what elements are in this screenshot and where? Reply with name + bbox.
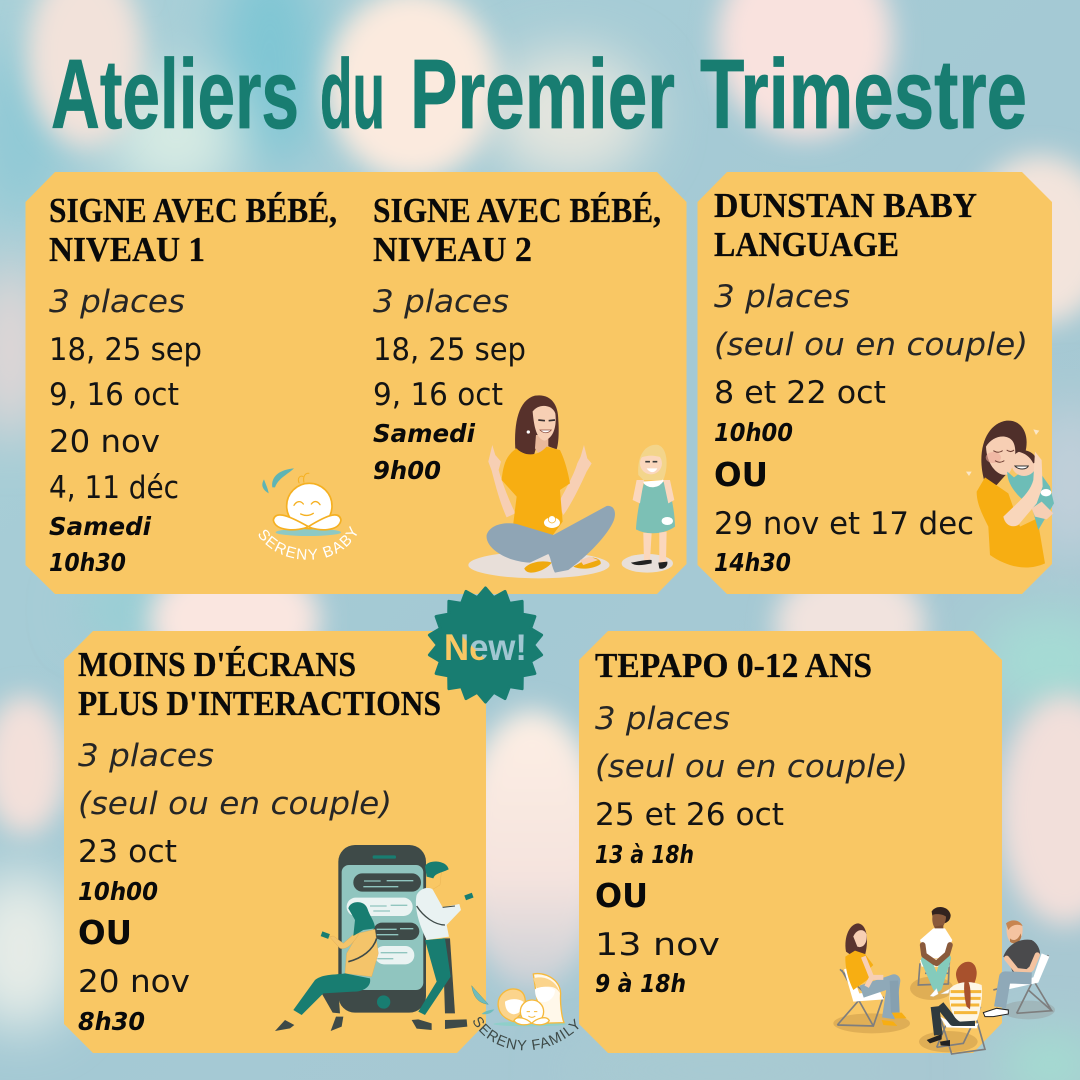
panel text: DUNSTAN BABY bbox=[714, 186, 977, 225]
logo: Sereny Family: SERENY FAMILY bbox=[473, 1017, 578, 1050]
column: niveau 2 bbox=[373, 191, 661, 485]
column: niveau 2: 9h00 bbox=[373, 456, 441, 485]
panel text: 8h30 bbox=[78, 1007, 145, 1036]
column: niveau 1: 9, 16 oct bbox=[49, 377, 179, 413]
panel text: (seul ou en couple) bbox=[595, 749, 908, 785]
badge text: New! bbox=[444, 627, 527, 668]
panel text: 20 nov bbox=[78, 964, 190, 1000]
panel shape bbox=[64, 631, 486, 1053]
panel text: OU bbox=[78, 913, 132, 952]
title: Premier bbox=[410, 39, 675, 149]
panel text: 9 à 18h bbox=[595, 969, 686, 998]
panel: moins d'écrans plus d'interactions bbox=[64, 631, 486, 1053]
panel text bbox=[78, 645, 441, 1036]
illustration: discussion group on folding chairs bbox=[833, 907, 1055, 1054]
panel: Dunstan Baby Language bbox=[698, 172, 1054, 594]
panel text: 3 places bbox=[714, 279, 850, 315]
column: niveau 2: Samedi bbox=[373, 419, 476, 448]
panel text: (seul ou en couple) bbox=[714, 327, 1028, 363]
panel text: OU bbox=[595, 876, 648, 915]
panel text: 29 nov et 17 dec bbox=[714, 506, 974, 542]
column: niveau 1: 20 nov bbox=[49, 424, 160, 460]
panel text: MOINS D'ÉCRANS bbox=[78, 645, 356, 684]
panel shape bbox=[698, 172, 1052, 594]
column: niveau 2: 9, 16 oct bbox=[373, 377, 503, 413]
panel text: 25 et 26 oct bbox=[595, 797, 784, 833]
panel shape bbox=[579, 631, 1002, 1053]
panel text: 23 oct bbox=[78, 834, 177, 870]
panel text: 10h00 bbox=[714, 418, 793, 447]
panel text: PLUS D'INTERACTIONS bbox=[78, 684, 441, 723]
panel shape bbox=[26, 172, 686, 594]
column: niveau 2: 18, 25 sep bbox=[373, 332, 526, 368]
logo: Sereny Baby: SERENY BABY bbox=[258, 526, 357, 560]
column: niveau 1: 4, 11 déc bbox=[49, 470, 179, 506]
panel: Tepapo 0-12 ans bbox=[579, 631, 1055, 1054]
column: niveau 1: 10h30 bbox=[49, 548, 126, 577]
panel text: TEPAPO 0-12 ANS bbox=[595, 646, 872, 685]
title bbox=[51, 39, 1027, 149]
panel text: 3 places bbox=[78, 738, 214, 774]
illustration: mother holding baby bbox=[966, 421, 1054, 567]
column: niveau 1: Samedi bbox=[49, 512, 152, 541]
panel text bbox=[714, 186, 1028, 577]
logo: Sereny Family bbox=[471, 972, 578, 1050]
column: niveau 2: 3 places bbox=[373, 284, 509, 320]
panel text: 3 places bbox=[595, 701, 730, 737]
badge: New! bbox=[429, 588, 542, 702]
column: niveau 1: NIVEAU 1 bbox=[49, 230, 205, 269]
logo: Sereny Baby bbox=[258, 468, 357, 560]
panel text: 10h00 bbox=[78, 877, 158, 906]
column: niveau 1: 3 places bbox=[49, 284, 185, 320]
column: niveau 1: SIGNE AVEC BÉBÉ, bbox=[49, 191, 337, 230]
illustration: two people on phones against a giant phone bbox=[275, 845, 474, 1031]
column: niveau 2: SIGNE AVEC BÉBÉ, bbox=[373, 191, 661, 230]
panel text: 14h30 bbox=[714, 548, 791, 577]
column: niveau 1: 18, 25 sep bbox=[49, 332, 202, 368]
panel text: (seul ou en couple) bbox=[78, 786, 392, 822]
panel text bbox=[595, 646, 908, 998]
title: du bbox=[320, 39, 385, 149]
column: niveau 1 bbox=[49, 191, 337, 577]
panel text: 13 nov bbox=[595, 927, 720, 963]
column: niveau 2: NIVEAU 2 bbox=[373, 230, 532, 269]
panel text: LANGUAGE bbox=[714, 225, 899, 264]
starburst bbox=[429, 588, 542, 702]
panel text: 8 et 22 oct bbox=[714, 375, 886, 411]
panel: signe avec bébé bbox=[26, 172, 686, 594]
title: Ateliers bbox=[51, 39, 299, 149]
illustration: woman and child signing bbox=[468, 395, 675, 578]
panel text: 13 à 18h bbox=[595, 840, 694, 869]
panel text: OU bbox=[714, 455, 768, 494]
